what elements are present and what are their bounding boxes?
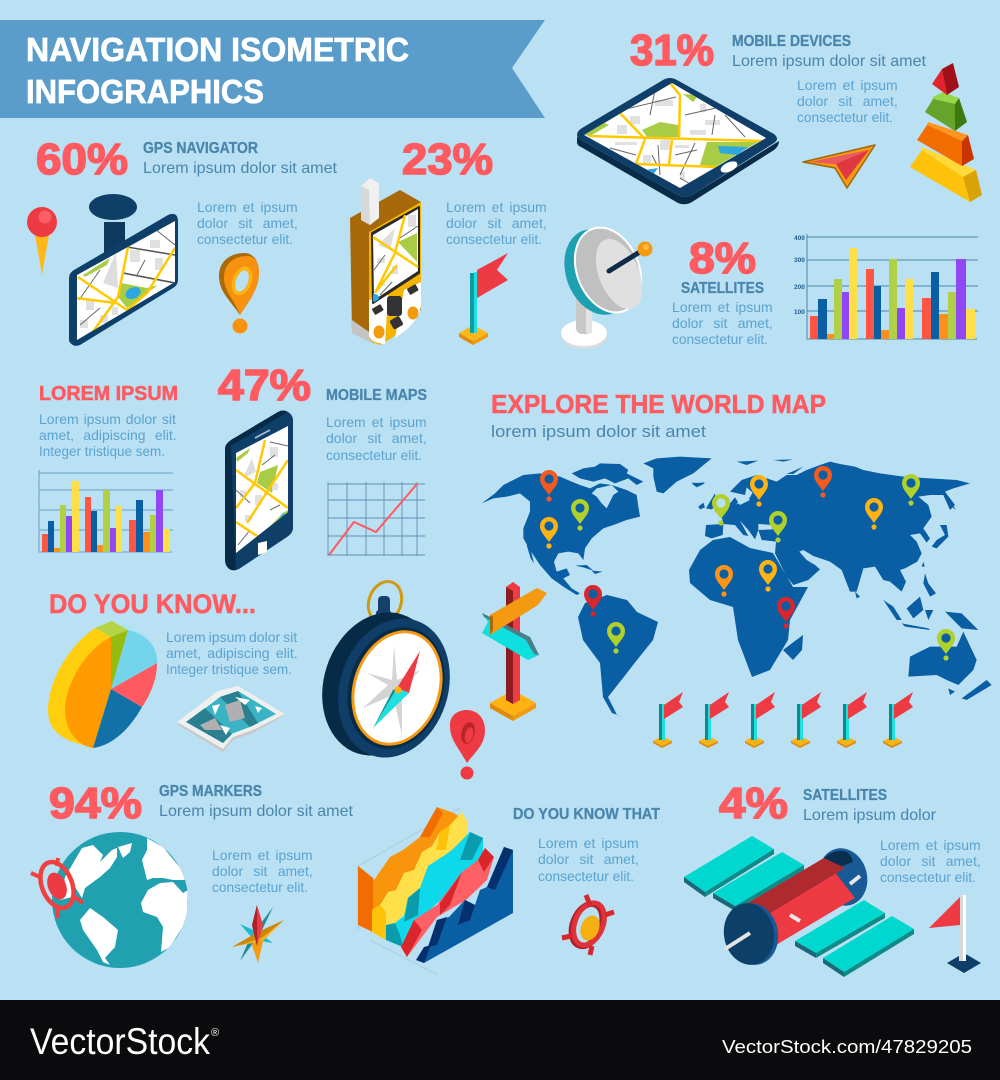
icon: car gps navigator [69, 194, 178, 346]
icon: signpost [482, 582, 547, 721]
footer bar [0, 1000, 1000, 1080]
text block: mobile devices: Lorem et ipsum [797, 77, 898, 93]
panel: gps navigator heading: 60% [36, 135, 128, 184]
panel: do you know heading: Integer tristique sem. [166, 661, 292, 677]
heading: do you know that: dolor sit amet, [538, 851, 639, 867]
panel: mobile maps heading [218, 361, 427, 463]
panel: satellites 8 percent: Lorem et ipsum [672, 299, 773, 315]
panel: gps markers heading: Lorem ipsum dolor sit amet [159, 803, 354, 820]
panel: lorem ipsum [39, 383, 178, 459]
bar chart: satellites: 300 [794, 257, 805, 264]
heading: explore the world map [491, 389, 826, 441]
title banner [0, 20, 545, 118]
footer bar: ® [211, 1027, 219, 1039]
panel: gps markers heading: GPS MARKERS [159, 783, 262, 800]
icon: red flag [459, 253, 508, 345]
text block: handheld gps [446, 199, 547, 247]
panel: mobile devices heading: 31% [630, 26, 714, 75]
text block: gps markers [212, 847, 313, 895]
text block: satellites: Lorem et ipsum [880, 837, 981, 853]
bar chart: satellites: 400 [794, 235, 805, 242]
text block: satellites [880, 837, 981, 885]
title banner: NAVIGATION ISOMETRIC [26, 31, 409, 68]
line chart: mobile maps [328, 482, 425, 556]
icon: satellite [684, 836, 914, 977]
heading: explore the world map: EXPLORE THE WORLD MAP [491, 389, 826, 419]
text block: satellites: dolor sit amet, [880, 853, 981, 869]
text block: gps navigator: consectetur elit. [197, 231, 293, 247]
footer bar: VectorStock [30, 1021, 210, 1062]
layer: yellow [372, 812, 468, 940]
icon: satellite dish [553, 216, 655, 349]
panel: mobile maps heading: 47% [218, 361, 311, 410]
text block: handheld gps: Lorem et ipsum [446, 199, 547, 215]
icon: paper plane arrow [803, 145, 875, 188]
island: madagascar [783, 635, 803, 660]
panel: mobile devices heading: Lorem ipsum dolor sit amet [732, 53, 927, 70]
icon: orange location pin [219, 253, 259, 334]
bar chart: lorem ipsum [39, 470, 173, 552]
bar chart: satellites: 100 [794, 309, 805, 316]
layer: red [401, 848, 494, 957]
footer bar: VectorStock.com/47829205 [722, 1037, 972, 1057]
panel: satellites 4 percent heading [719, 779, 937, 828]
pins [540, 466, 955, 661]
region: asia pacific islands and australia [855, 493, 992, 700]
panel: lorem ipsum: Lorem ipsum dolor sit [39, 411, 176, 427]
region: europe, asia and africa north [692, 459, 970, 592]
world map [482, 457, 992, 717]
panel: mobile maps heading: dolor sit amet, [326, 430, 427, 446]
pie chart isometric [48, 621, 157, 748]
text block: gps markers: dolor sit amet, [212, 863, 313, 879]
icon: red ball pin [27, 207, 57, 275]
panel: lorem ipsum: LOREM IPSUM [39, 383, 178, 405]
icon: red location pin [450, 710, 485, 780]
panel: gps navigator heading [36, 135, 338, 184]
panel: mobile maps heading: MOBILE MAPS [326, 387, 427, 404]
icon: tablet with map [577, 78, 779, 204]
heading: do you know that: Lorem et ipsum [538, 835, 639, 851]
text block: mobile devices: dolor sit amet, [797, 93, 898, 109]
panel: satellites 4 percent heading: Lorem ipsum dolor [803, 807, 937, 824]
panel: do you know heading [49, 589, 298, 677]
icon: smartphone with map [225, 410, 293, 570]
continent: africa [689, 537, 808, 677]
panel: do you know heading: amet, adipiscing elit. [166, 645, 298, 661]
chart: 3d area chart [358, 807, 513, 975]
icon: compass [304, 577, 467, 772]
heading: do you know that [513, 806, 660, 884]
title banner: INFOGRAPHICS [26, 73, 264, 110]
icon: small red target [562, 895, 614, 955]
panel: do you know heading: Lorem ipsum dolor sit [166, 629, 297, 645]
panel: mobile devices heading: MOBILE DEVICES [732, 33, 851, 50]
panel: satellites 8 percent: 8% [689, 234, 756, 283]
panel: satellites 4 percent heading: SATELLITES [803, 787, 887, 804]
heading: do you know that: consectetur elit. [538, 868, 634, 884]
panel: lorem ipsum: amet, adipiscing elit. [39, 427, 177, 443]
panel: satellites 8 percent: SATELLITES [681, 280, 764, 297]
text block: handheld gps: dolor sit amet, [446, 215, 547, 231]
panel: mobile maps heading: consectetur elit. [326, 447, 422, 463]
panel: satellites 8 percent [672, 234, 773, 347]
icon: compass star [232, 905, 284, 963]
panel: mobile maps heading: Lorem et ipsum [326, 414, 427, 430]
panel: 23 percent heading: 23% [402, 135, 493, 184]
continent: south america [578, 595, 658, 717]
text block: gps markers: Lorem et ipsum [212, 847, 313, 863]
heading: explore the world map: lorem ipsum dolor sit amet [491, 422, 706, 441]
icon: white pole flag [929, 895, 981, 973]
panel: gps markers heading: 94% [49, 779, 142, 828]
panel: gps navigator heading: Lorem ipsum dolor sit amet [143, 160, 338, 177]
text block: gps navigator [197, 199, 298, 247]
icon: globe with target [31, 832, 188, 968]
text block: handheld gps: consectetur elit. [446, 231, 542, 247]
panel: satellites 4 percent heading: 4% [719, 779, 788, 828]
bar chart: satellites: 200 [794, 284, 805, 291]
text block: gps navigator: Lorem et ipsum [197, 199, 298, 215]
text block: satellites: consectetur elit. [880, 869, 976, 885]
icon: handheld gps device [350, 178, 421, 345]
icon: folded world map [177, 686, 285, 752]
panel: do you know heading: DO YOU KNOW... [49, 589, 256, 619]
panel: mobile devices heading [630, 26, 927, 75]
panel: lorem ipsum: Integer tristique sem. [39, 443, 165, 459]
text block: mobile devices: consectetur elit. [797, 109, 893, 125]
text block: mobile devices [797, 77, 898, 125]
text block: gps navigator: dolor sit amet, [197, 215, 298, 231]
layer: cyan [386, 832, 483, 947]
row of flags [653, 692, 913, 748]
panel: gps navigator heading: GPS NAVIGATOR [143, 140, 258, 157]
heading: do you know that: DO YOU KNOW THAT [513, 806, 660, 823]
text block: gps markers: consectetur elit. [212, 879, 308, 895]
panel: satellites 8 percent: dolor sit amet, [672, 315, 773, 331]
layer: orange [358, 807, 468, 932]
region: north america and greenland [482, 457, 712, 595]
panel: gps markers heading [49, 779, 354, 828]
icon: stacked pyramid [910, 63, 982, 202]
panel: satellites 8 percent: consectetur elit. [672, 331, 768, 347]
bar chart: satellites [794, 234, 978, 339]
layer: blue [416, 847, 513, 963]
